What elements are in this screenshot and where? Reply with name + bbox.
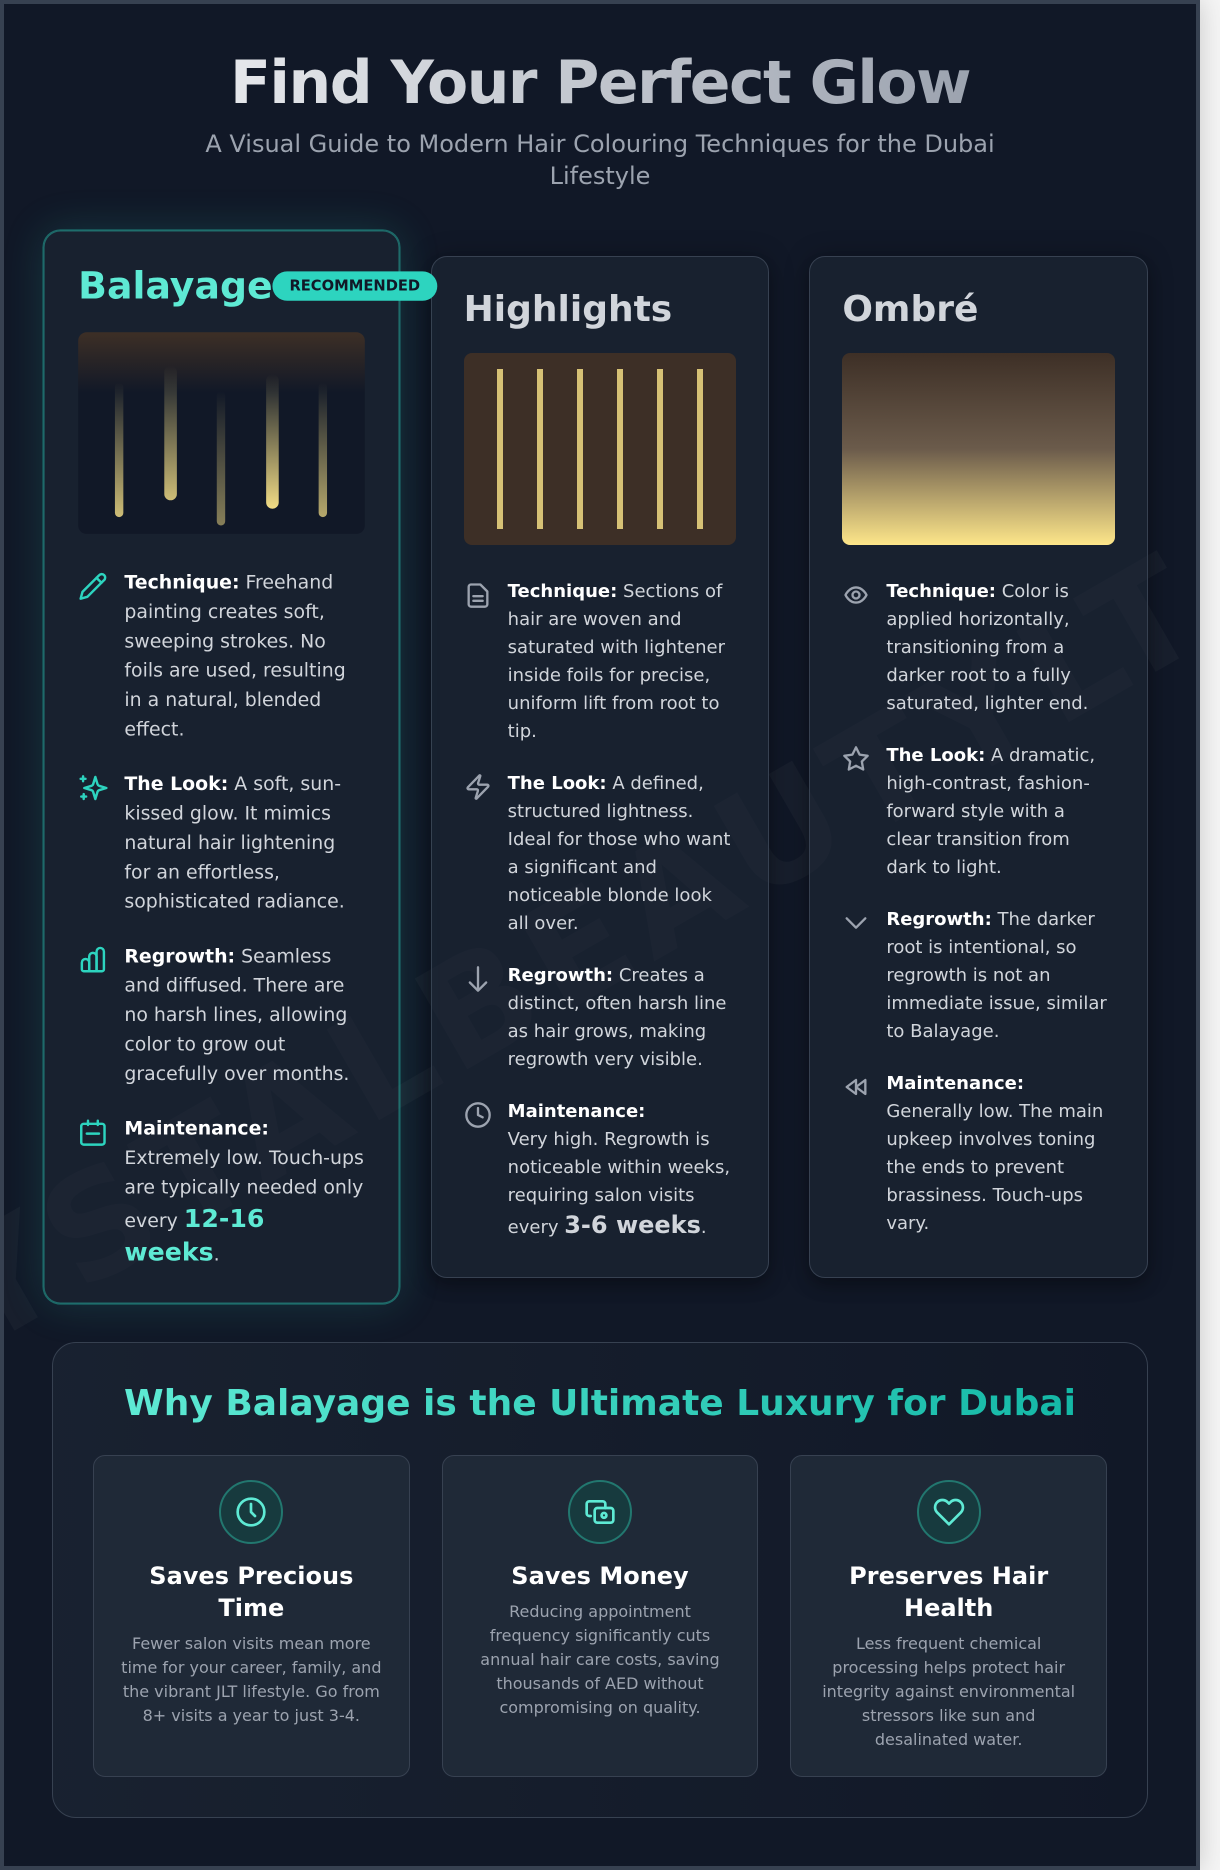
balayage heading with badge [78, 265, 438, 308]
balayage technique: Technique: Freehand painting creates soft, sweeping strokes. No foils are used, resulting in a natural, blended effect. [124, 572, 346, 741]
panel: why balayage [52, 1342, 1148, 1818]
balayage maintenance: Extremely low. Touch-ups are typically needed only every 12-16 weeks. [124, 1147, 364, 1267]
panel: balayage [44, 230, 399, 1304]
ombre heading: Ombré [842, 289, 978, 330]
title: Find Your Perfect Glow [230, 48, 970, 118]
icon: banknotes [568, 1480, 632, 1544]
ombre maintenance [846, 1073, 1103, 1234]
benefit heading: Saves Money [511, 1562, 689, 1590]
ombre hair visual [842, 353, 1115, 545]
highlights hair visual [464, 353, 736, 545]
panel: ombre [809, 256, 1148, 1278]
balayage heading with badge: Balayage [78, 265, 273, 308]
highlights maintenance [465, 1101, 730, 1239]
ombre regrowth: Regrowth: The darker root is intentional, so regrowth is not an immediate issue, similar to Balayage. [886, 909, 1107, 1042]
icon: heart [917, 1480, 981, 1544]
header [205, 48, 995, 190]
icon: clock [219, 1480, 283, 1544]
panel: highlights [431, 256, 769, 1278]
benefit heading: Saves Precious Time [149, 1562, 353, 1622]
highlights details [465, 581, 730, 1239]
benefit: saves money [442, 1455, 758, 1777]
technique comparison cards [33, 220, 1151, 1314]
section heading: Why Balayage is the Ultimate Luxury for Dubai [124, 1383, 1076, 1424]
highlights regrowth: Regrowth: Creates a distinct, often harsh line as hair grows, making regrowth very visible. [508, 965, 726, 1070]
ombre maintenance: Generally low. The main upkeep involves toning the ends to prevent brassiness. Touch-ups vary. [886, 1101, 1103, 1234]
highlights technique: Technique: Sections of hair are woven and saturated with lightener inside foils for precise, uniform lift from root to tip. [508, 581, 725, 742]
ombre details [843, 581, 1107, 1234]
highlights heading: Highlights [464, 289, 672, 330]
ombre technique: Technique: Color is applied horizontally, transitioning from a darker root to a fully saturated, lighter end. [886, 581, 1088, 714]
balayage heading with badge: RECOMMENDED [289, 278, 420, 294]
balayage hair visual [78, 332, 364, 534]
balayage look: The Look: A soft, sun-kissed glow. It mimics natural hair lightening for an effortless, sophisticated radiance. [124, 773, 345, 913]
benefit cards [93, 1455, 1107, 1777]
balayage maintenance [80, 1118, 364, 1267]
benefit heading: Preserves Hair Health [849, 1562, 1048, 1622]
balayage details [79, 572, 364, 1267]
highlights maintenance: Maintenance: [508, 1101, 645, 1122]
benefit text: Reducing appointment frequency significantly cuts annual hair care costs, saving thousands of AED without compromising on quality. [480, 1602, 720, 1717]
balayage regrowth: Regrowth: Seamless and diffused. There are no harsh lines, allowing color to grow out gracefully over months. [124, 946, 349, 1085]
subtitle: A Visual Guide to Modern Hair Colouring Techniques for the Dubai Lifestyle [205, 130, 995, 190]
benefit text: Less frequent chemical processing helps protect hair integrity against environmental stressors like sun and desalinated water. [822, 1634, 1075, 1749]
ombre look: The Look: A dramatic, high-contrast, fashion-forward style with a clear transition from dark to light. [886, 745, 1095, 878]
ombre maintenance: Maintenance: [886, 1073, 1024, 1094]
benefit: hair health [790, 1455, 1107, 1777]
balayage maintenance: Maintenance: [124, 1118, 269, 1140]
highlights look: The Look: A defined, structured lightness. Ideal for those who want a significant and noticeable blonde look all over. [508, 773, 730, 934]
benefit text: Fewer salon visits mean more time for your career, family, and the vibrant JLT lifestyle. Go from 8+ visits a year to just 3-4. [121, 1634, 381, 1725]
benefit: saves time [93, 1455, 410, 1777]
highlights maintenance: Very high. Regrowth is noticeable within weeks, requiring salon visits every 3-6 weeks. [508, 1129, 730, 1239]
